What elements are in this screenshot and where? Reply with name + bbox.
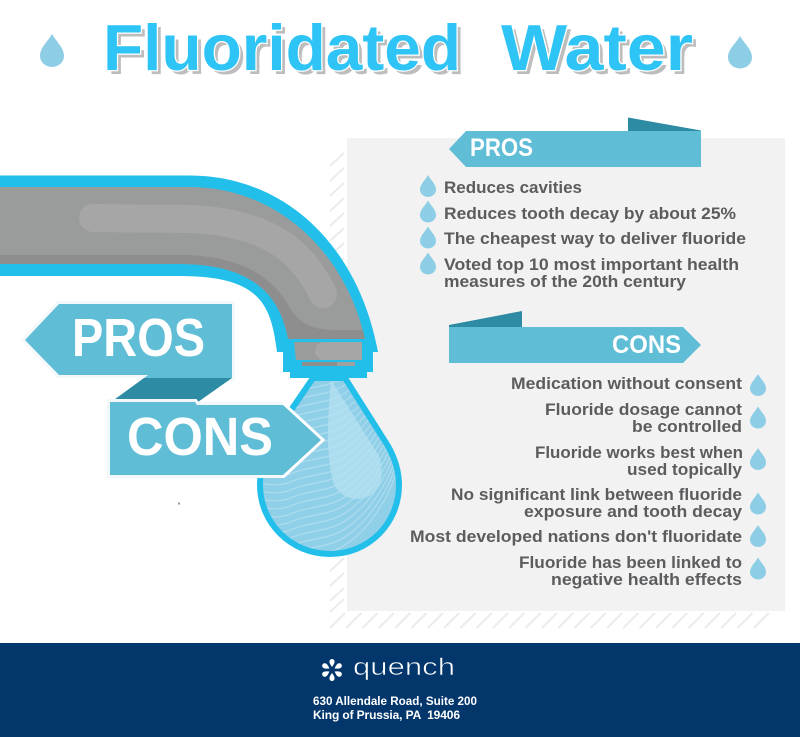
icon: drop 1	[420, 175, 436, 197]
faucet	[0, 176, 378, 378]
con 4: No significant link between fluoride	[451, 485, 742, 504]
con 3	[535, 443, 743, 479]
title: Water	[501, 11, 693, 84]
footer	[0, 643, 800, 737]
arrow: cons: CONS	[127, 407, 273, 467]
pro 3: The cheapest way to deliver fluoride	[444, 229, 746, 248]
icon: con drop 5	[750, 525, 766, 547]
pro 2: Reduces tooth decay by about 25%	[444, 204, 736, 223]
con 4	[451, 485, 743, 521]
arrow: pros: PROS	[72, 308, 205, 368]
faucet nozzle	[294, 342, 362, 366]
con 6	[519, 553, 742, 589]
arrow: pros	[25, 304, 232, 378]
title	[103, 11, 697, 88]
con 1: Medication without consent	[511, 374, 742, 393]
icon: drop 4	[420, 252, 436, 275]
pro 4: Voted top 10 most important health	[444, 255, 739, 274]
con 6: Fluoride has been linked to	[519, 553, 742, 572]
arrows: pros and cons	[25, 304, 322, 477]
title: Fluoridated	[107, 15, 465, 88]
water drop	[257, 378, 402, 557]
banner: pros ribbon: PROS	[470, 134, 533, 162]
panel: pros and cons background	[347, 138, 785, 611]
icon: con drop 1	[750, 374, 766, 396]
icon: quench flower logo	[321, 659, 343, 681]
pro 1: Reduces cavities	[444, 178, 582, 197]
address: 630 Allendale Road, Suite 200	[313, 694, 477, 708]
icon: con drop 2	[750, 406, 766, 428]
icon: con drop 6	[750, 558, 766, 580]
con 3: used topically	[627, 460, 743, 479]
address	[313, 694, 477, 722]
cons list	[410, 374, 766, 589]
icon: con drop 3	[750, 448, 766, 470]
banner: cons ribbon: CONS	[612, 331, 681, 359]
con 6: negative health effects	[551, 570, 742, 589]
pro 4: measures of the 20th century	[444, 272, 687, 291]
arrow: cons	[110, 402, 322, 477]
con 3: Fluoride works best when	[535, 443, 743, 462]
title: Fluoridated	[103, 11, 461, 84]
panel: hatched shadow	[330, 153, 769, 628]
quench wordmark: quench	[353, 654, 455, 681]
title: Water	[505, 15, 697, 88]
con 5: Most developed nations don't fluoridate	[410, 527, 742, 546]
banner: pros ribbon	[449, 118, 701, 167]
pros list	[420, 175, 746, 291]
con 2	[545, 400, 742, 436]
icon: title drop left	[40, 34, 64, 67]
icon: title drop right	[728, 36, 752, 68]
pro 4	[444, 255, 739, 291]
banner: cons ribbon	[449, 311, 701, 363]
address: King of Prussia, PA 19406	[313, 708, 460, 722]
icon: drop 3	[420, 226, 436, 249]
con 4: exposure and tooth decay	[524, 502, 743, 521]
con 2: be controlled	[632, 417, 742, 436]
fold between arrows	[111, 378, 232, 402]
title: Water	[501, 11, 693, 84]
title: Fluoridated	[103, 11, 461, 84]
con 2: Fluoride dosage cannot	[545, 400, 742, 419]
icon: drop 2	[420, 200, 436, 223]
icon: con drop 4	[750, 492, 766, 515]
